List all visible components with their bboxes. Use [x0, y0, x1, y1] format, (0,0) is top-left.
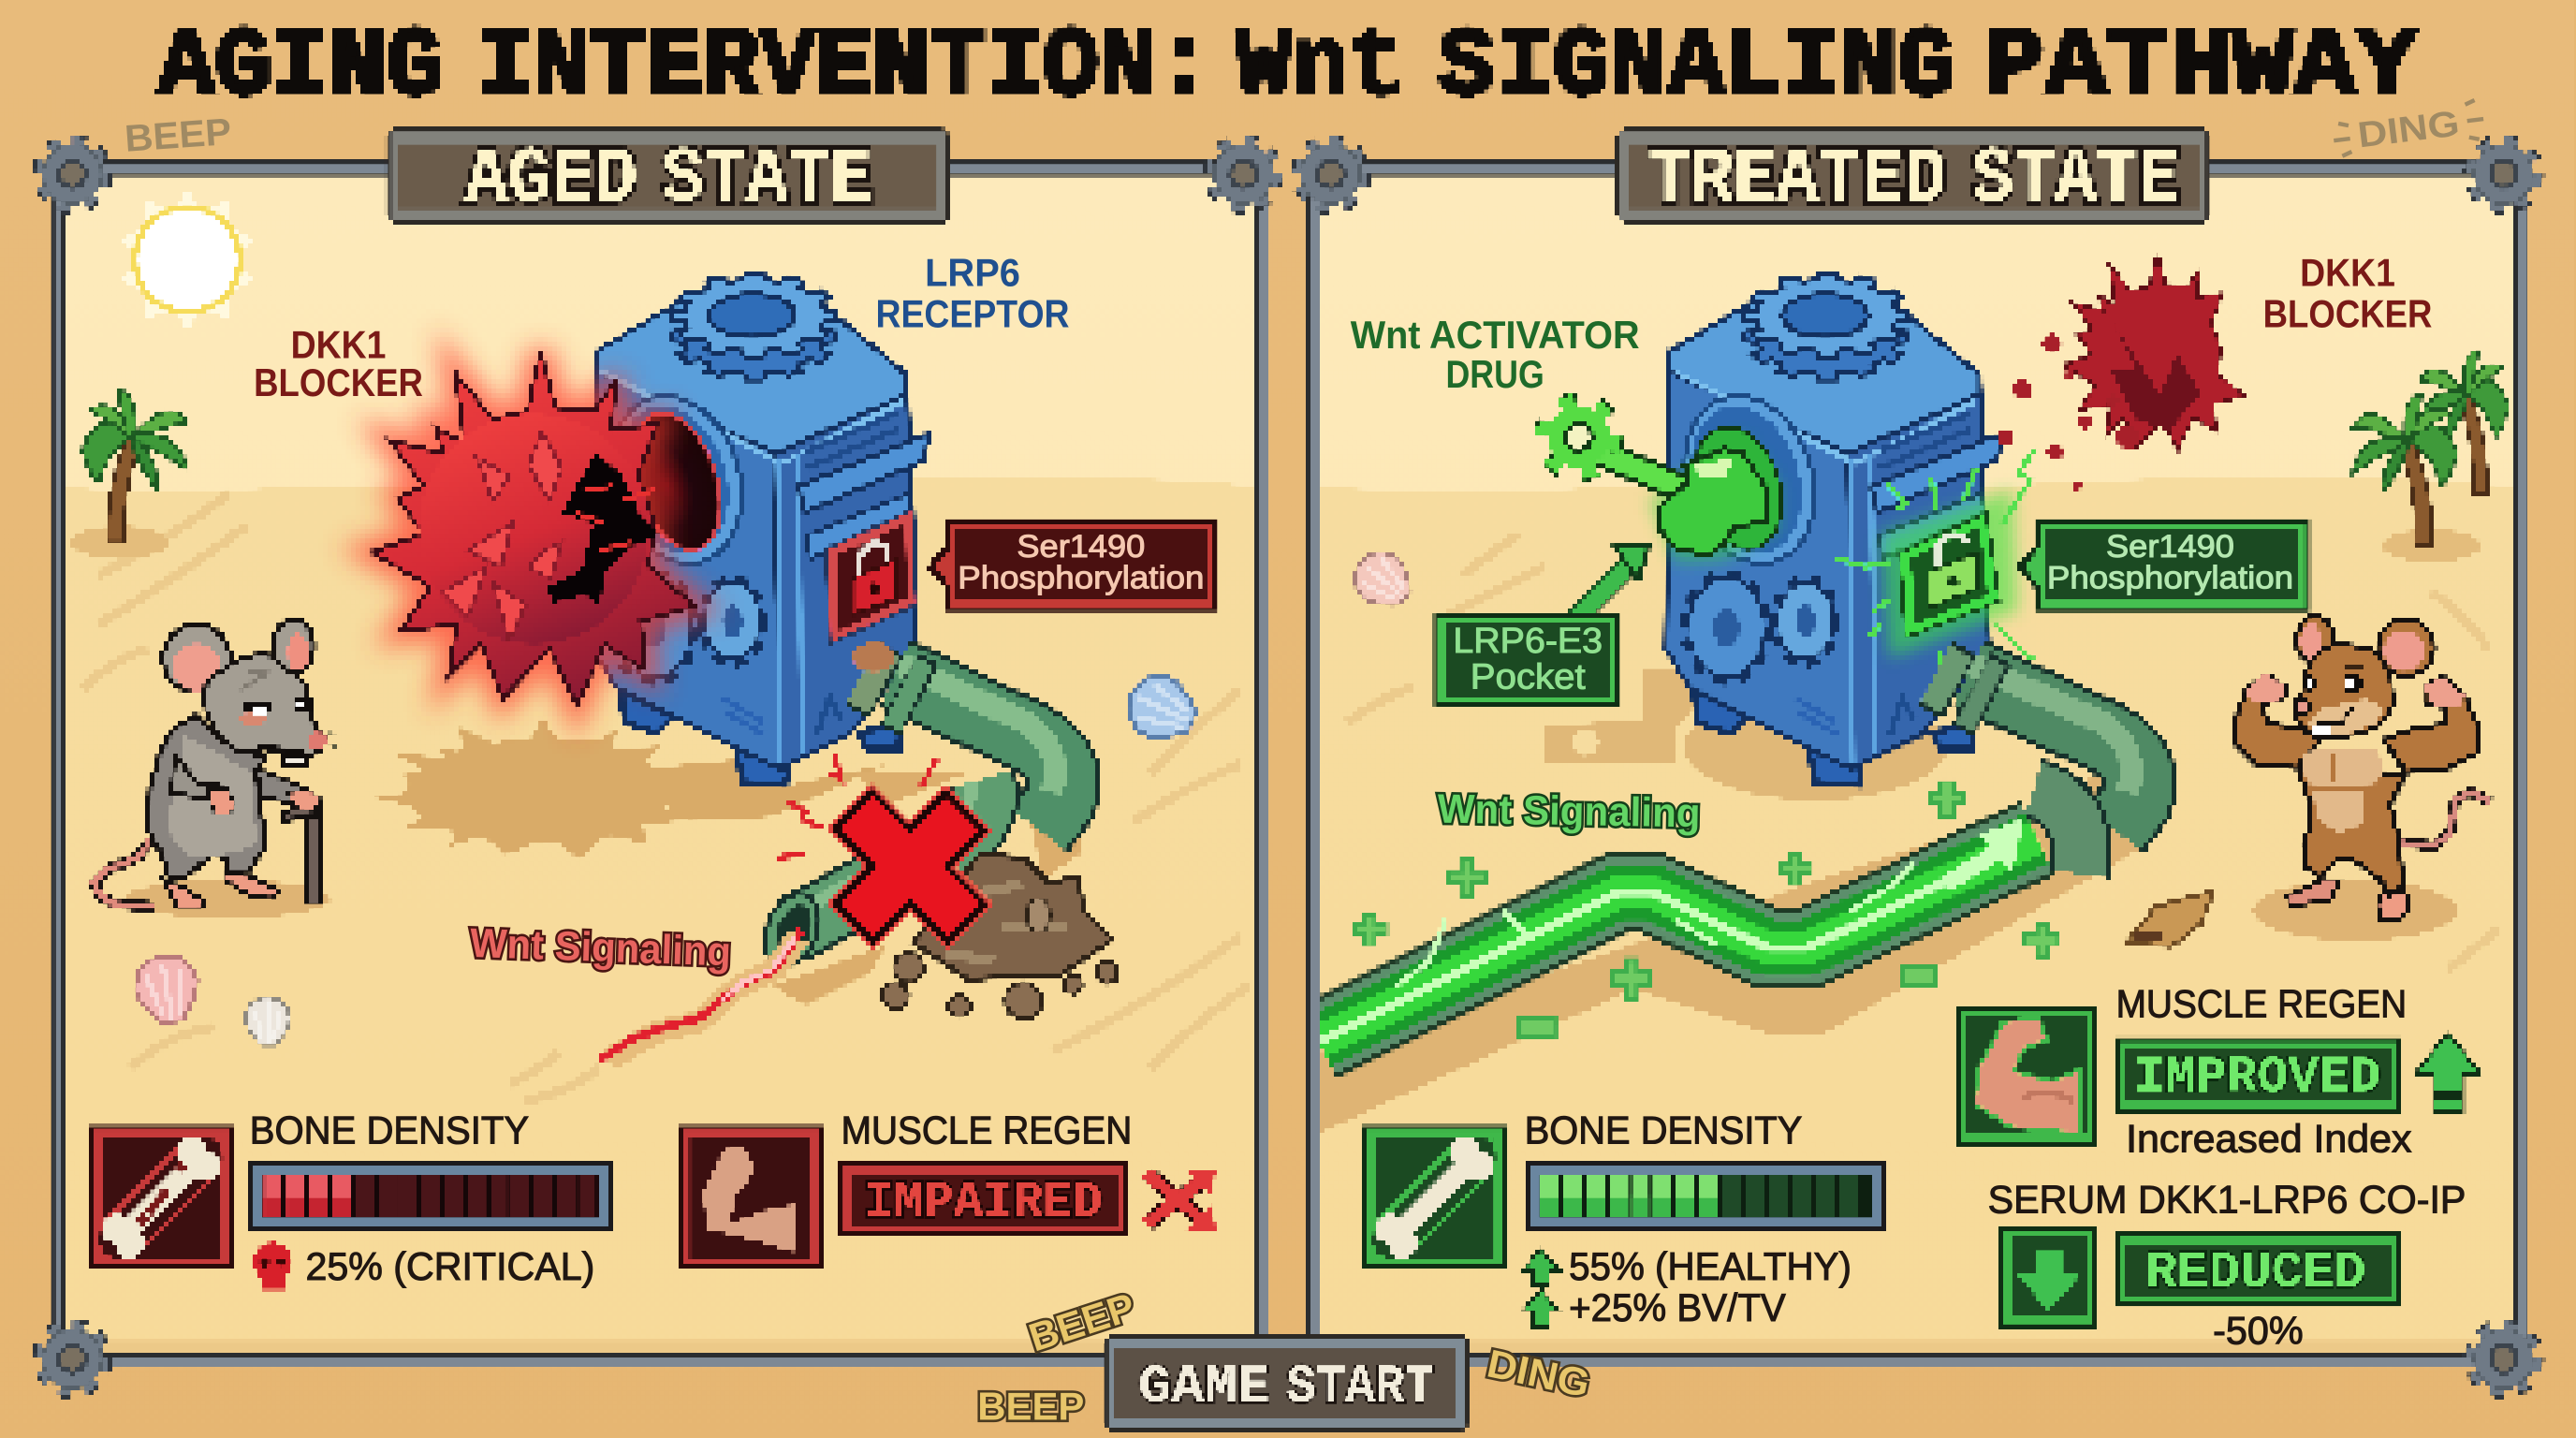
pipe: broken Wnt pipeline in aged state: [754, 642, 1063, 975]
label: treated Ser1490: Ser1490: [2106, 529, 2234, 565]
sound effect: lower BEEP: BEEP: [1023, 1284, 1140, 1359]
label: aged bone density: BONE DENSITY: [250, 1109, 529, 1152]
shadow: treated machine and pipeline: [1319, 668, 2150, 1134]
icon: pink shell: [130, 951, 203, 1027]
rat tail: [94, 840, 153, 907]
plaque: treated state heading: TREATED: [1647, 136, 1947, 225]
label: LRP6 receptor: RECEPTOR: [875, 292, 1070, 335]
mouse feet: [2287, 880, 2340, 907]
key gear: [1543, 401, 1615, 473]
label: LRP6-E3 pocket: LRP6-E3: [1453, 621, 1603, 660]
flanges: [1936, 674, 1960, 687]
label: treated DKK1 blocker: BLOCKER: [2263, 292, 2432, 335]
lock panel: closed phosphorylation site: [827, 509, 916, 644]
label: serum co-ip: SERUM DKK1-LRP6 CO-IP: [1988, 1178, 2466, 1221]
label: aged muscle regen: MUSCLE REGEN: [842, 1109, 1132, 1152]
DKK1 blocker ejected, treated state: [1998, 253, 2244, 492]
rat ears: [163, 624, 230, 692]
game start button box: [1103, 1334, 1471, 1431]
stat icon: healthy bone: [1364, 1125, 1506, 1270]
frame: treated panel: [1306, 161, 2526, 1367]
plaque: treated state heading: [1615, 128, 2211, 225]
status badge: improved box: [2115, 1036, 2402, 1112]
value: 55 percent healthy: 55% (HEALTHY): [1569, 1245, 1852, 1288]
stat icon: strong muscle: [1955, 1005, 2098, 1145]
icon: rubble pile: [882, 855, 1118, 1019]
upper elbow: [896, 674, 1063, 829]
rat head: [203, 653, 325, 758]
surface spikes: [444, 431, 562, 640]
value: increased index: Increased Index: [2126, 1117, 2412, 1160]
panel: aged state background: [57, 169, 1262, 1360]
pixel text layer for badges: [864, 1049, 2380, 1418]
rat arm and hand: [171, 756, 225, 800]
mouse head: [2295, 643, 2393, 737]
panel: treated state background: [1314, 169, 2519, 1360]
mouse shadow: [2253, 880, 2458, 941]
sound effect: top-right DING with dashes: [2331, 99, 2486, 159]
label: treated DKK1 blocker: DKK1: [2300, 251, 2395, 294]
blocked receptor hole: [618, 402, 736, 561]
pipe: working Wnt pipeline: [1319, 664, 2140, 1042]
title: INTERVENTION:: [476, 11, 1212, 124]
flanges: [862, 674, 887, 687]
treated machine: LRP6 receptor: [1664, 273, 2037, 785]
label: treated Ser1490: Phosphorylation: [2047, 560, 2293, 595]
mouse torso and legs: [2298, 768, 2406, 896]
frame: aged panel: [50, 161, 1268, 1367]
icon: big up arrow: [2415, 1032, 2481, 1112]
sound effect: bottom DING: DING: [1484, 1342, 1594, 1405]
button text: game start: START: [1286, 1357, 1434, 1418]
bone density bar, treated: [1525, 1160, 1886, 1232]
button text: game start: GAME: [1138, 1357, 1270, 1418]
drug plug and key: [1543, 401, 1796, 562]
icon: snail shell: [2126, 892, 2213, 946]
label: treated bone density: BONE DENSITY: [1525, 1109, 1802, 1152]
mouse chest and abs: [2303, 749, 2384, 786]
badge text: improved: IMPROVED: [2134, 1049, 2380, 1107]
value: minus 50 percent: -50%: [2213, 1310, 2304, 1353]
stat icon: weak muscle: [679, 1125, 823, 1270]
icon: red X block: [775, 755, 946, 903]
icon: left palm tree: [70, 391, 187, 559]
rat tired eyes: [240, 712, 266, 726]
Wnt signal leak streak: [600, 930, 801, 1060]
label: LRP6-E3 pocket: Pocket: [1471, 656, 1586, 696]
lower broken pipe: [792, 779, 985, 930]
icon: shell near pocket: [1344, 541, 1421, 618]
badge text: reduced: REDUCED: [2145, 1245, 2365, 1302]
DKK1 spiked ball, aged state: [372, 352, 695, 707]
mouse ears: [2296, 616, 2334, 663]
icon: blue shell: [1119, 667, 1205, 751]
glowing tube: [1319, 838, 2037, 1042]
plug: [1658, 448, 1768, 555]
key rod: [1602, 453, 1686, 490]
status badge: impaired box: [840, 1162, 1129, 1238]
icon: skull: [253, 1242, 292, 1290]
icon: crossed red arrows: [1147, 1168, 1216, 1231]
aged rat: [94, 620, 342, 918]
label: aged Wnt signaling: Wnt Signaling: [469, 920, 732, 976]
label: Wnt activator drug: DRUG: [1445, 353, 1544, 396]
status badge: reduced box: [2115, 1232, 2402, 1308]
label: aged DKK1 blocker: BLOCKER: [254, 361, 423, 404]
label: treated muscle regen: MUSCLE REGEN: [2116, 982, 2407, 1025]
lock panel: open phosphorylation site: [1881, 490, 2017, 657]
label: Wnt activator drug: Wnt ACTIVATOR: [1351, 314, 1640, 357]
stat icon: down arrow: [1999, 1225, 2098, 1328]
debris: [1998, 333, 2139, 492]
mouse tail: [2399, 791, 2490, 846]
rat body: [148, 714, 265, 877]
tube flange: [2034, 788, 2082, 874]
callout box: aged Ser1490: [927, 518, 1219, 611]
mouse arms: [2234, 674, 2321, 768]
crack in ball: [547, 452, 661, 616]
label: aged Ser1490: Phosphorylation: [958, 560, 1204, 595]
icon: sun: [120, 189, 255, 332]
label: LRP6 receptor: LRP6: [925, 251, 1020, 294]
title: PATHWAY: [1983, 11, 2419, 124]
plaque: aged state heading: STATE: [662, 136, 872, 225]
sound effect: top-right DING with dashes: DING: [2356, 103, 2462, 155]
upper elbow: [1969, 674, 2140, 829]
plus and minus signal particles: [1354, 782, 2058, 1035]
label: aged Ser1490: Ser1490: [1017, 529, 1145, 565]
bone density bar, aged: [250, 1160, 613, 1232]
callout box: LRP6-E3 pocket: [1434, 613, 1621, 708]
arrow: pocket pointer: [1569, 544, 1649, 624]
label: aged DKK1 blocker: DKK1: [291, 324, 386, 367]
plaque: treated state heading: STATE: [1971, 136, 2180, 225]
title: AGING: [157, 11, 444, 124]
plaque: aged state heading: [386, 128, 951, 225]
mouse eyes: [2343, 673, 2362, 694]
value: plus 25 percent BV/TV: +25% BV/TV: [1569, 1286, 1786, 1329]
aged machine: LRP6 receptor: [591, 273, 929, 785]
callout box: treated Ser1490: [2016, 518, 2310, 611]
rat feet: [162, 879, 204, 908]
shadow: machine and DKK1 in aged state: [373, 717, 1079, 1005]
icon: right palm trees: [2352, 350, 2509, 562]
sound effect: top-left BEEP: BEEP: [124, 110, 233, 160]
plaque: aged state heading: AGED: [465, 136, 637, 225]
sound effect: bottom BEEP: BEEP: [977, 1384, 1084, 1428]
title: Wnt: [1236, 11, 1405, 124]
stat icon: damaged bone: [91, 1125, 233, 1270]
rat cane: [281, 802, 320, 903]
energy sparks: [1837, 447, 2037, 690]
badge text: impaired: IMPAIRED: [864, 1175, 1103, 1232]
label: treated Wnt signaling: Wnt Signaling: [1437, 786, 1701, 837]
icon: white shell: [245, 998, 290, 1045]
icon: small up arrows: [1523, 1249, 1559, 1326]
value: 25 percent critical: 25% (CRITICAL): [305, 1245, 594, 1288]
strong mouse: [2234, 616, 2490, 941]
rat shadow: [124, 880, 330, 918]
title: SIGNALING: [1438, 11, 1955, 124]
